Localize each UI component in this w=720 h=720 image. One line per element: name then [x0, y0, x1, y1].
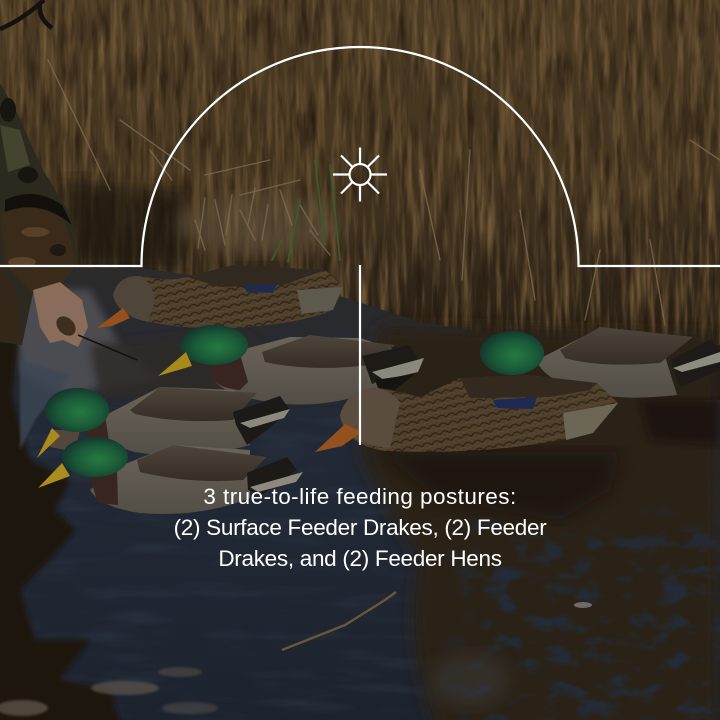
upper left blue water	[20, 360, 70, 450]
caption text: (2) Surface Feeder Drakes, (2) Feeder	[174, 515, 546, 540]
icon: vertical pointer line	[359, 265, 361, 445]
decoy: back hen	[97, 265, 343, 328]
decoy: front hen	[315, 375, 618, 452]
caption text	[174, 484, 546, 571]
brown reflection, left bank	[0, 340, 120, 720]
pale water near the hand	[15, 290, 160, 395]
floating stick	[282, 592, 396, 650]
decoy: left drake lower	[38, 437, 303, 514]
icon: sun	[333, 148, 387, 202]
pale reflected patches	[91, 681, 159, 695]
decoy: centre drake	[158, 325, 424, 404]
strap	[0, 0, 52, 29]
reed reflection brown patch, right	[360, 325, 720, 720]
caption text: 3 true-to-life feeding postures:	[203, 484, 517, 509]
icon: arch outline with horizon line	[0, 47, 720, 266]
pale and green reed blades	[48, 60, 720, 325]
hand	[33, 282, 88, 347]
dark reflection beneath ducks	[380, 452, 620, 520]
water	[0, 268, 720, 720]
hunter: camouflage arm and hand	[0, 0, 137, 360]
reed bed	[0, 0, 720, 345]
decoy: left drake upper	[37, 387, 290, 458]
decoy: right drake	[480, 327, 720, 398]
caption text: Drakes, and (2) Feeder Hens	[218, 546, 502, 571]
